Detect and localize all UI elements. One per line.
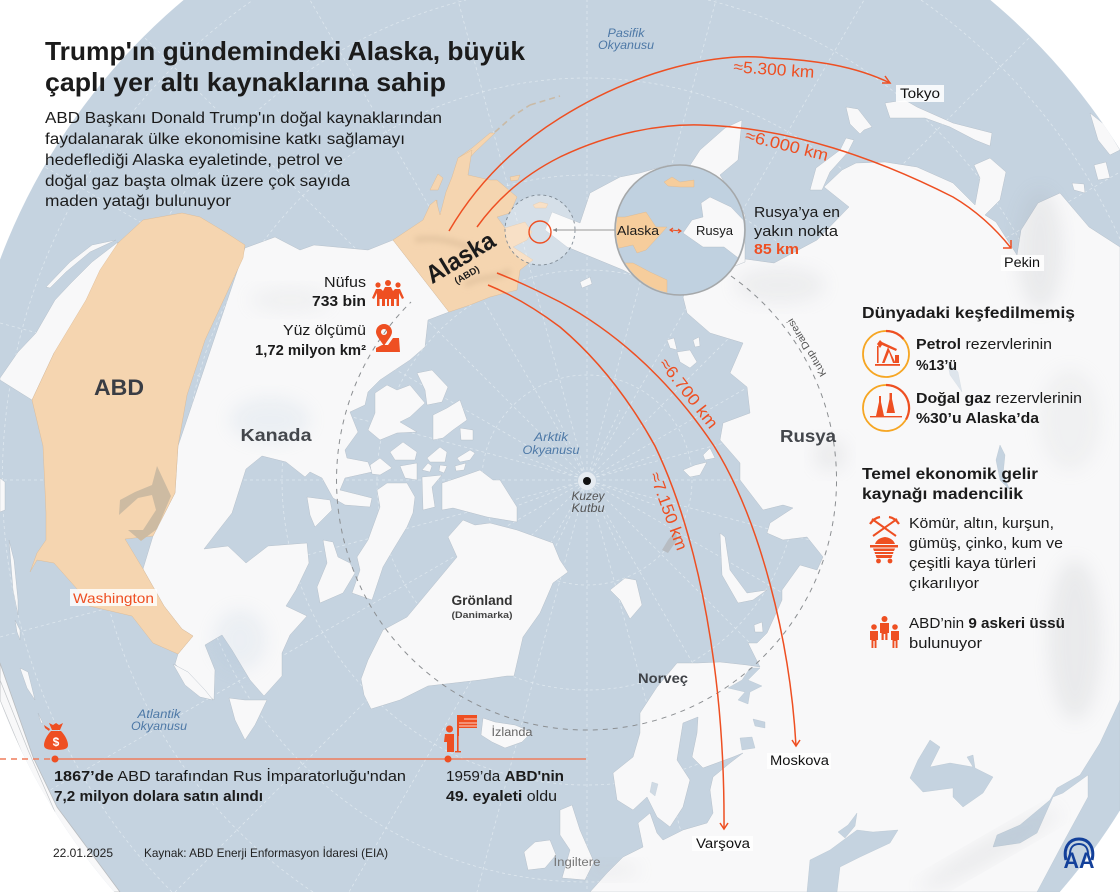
inset: Diomede island bbox=[664, 177, 694, 187]
land: Pacific and Arctic islands bbox=[430, 96, 1120, 632]
text: military bases bbox=[909, 616, 1065, 652]
label: USA: ABD bbox=[94, 375, 144, 400]
label: Washington: Washington bbox=[73, 590, 154, 606]
label: Canada: Kanada bbox=[240, 425, 312, 445]
intro paragraph: hedeflediği Alaska eyaletinde, petrol ve bbox=[45, 152, 343, 169]
route distance labels bbox=[646, 58, 830, 553]
city label: Moscow: Moskova bbox=[770, 753, 830, 768]
stat: area: Yüz ölçümü bbox=[283, 323, 366, 339]
city label: Warsaw: Varşova bbox=[696, 836, 751, 851]
land: relief shading bbox=[214, 190, 1101, 892]
region: Alaska bbox=[393, 150, 533, 312]
icon: map pin bbox=[376, 324, 400, 352]
stat: population: Nüfus bbox=[324, 275, 366, 291]
text: 1959 statehood bbox=[446, 768, 564, 805]
North Pole marker bbox=[572, 472, 606, 515]
label: Russia: Rusya bbox=[780, 426, 836, 446]
inset labels bbox=[617, 223, 734, 238]
label: Alaska: Alaska bbox=[421, 226, 501, 289]
text: oil share: Petrol rezervlerinin bbox=[916, 337, 1052, 353]
land: Greenland bbox=[361, 520, 568, 709]
heading: undiscovered reserves: Dünyadaki keşfedilmemiş bbox=[862, 305, 1075, 322]
land: Chukotka and Kamchatka bbox=[545, 120, 745, 290]
label: Atlantic Ocean: Atlantik bbox=[136, 709, 182, 721]
footer: source: Kaynak: ABD Enerji Enformasyon İdaresi (EIA) bbox=[144, 846, 388, 860]
label: Pacific Ocean: Pasifik bbox=[608, 28, 646, 40]
region: United States mainland bbox=[30, 213, 245, 654]
North Pole marker: Kutbu bbox=[572, 503, 605, 515]
land: Iceland bbox=[481, 718, 532, 748]
stat: population bbox=[312, 275, 366, 310]
intro paragraph: ABD Başkanı Donald Trump'ın doğal kaynaklarından bbox=[45, 110, 442, 127]
text: gas share: Doğal gaz rezervlerinin bbox=[916, 391, 1082, 407]
inset map: Bering Strait bbox=[610, 165, 750, 296]
city label: Tokyo: Tokyo bbox=[900, 86, 940, 101]
callout: nearest point to Russia bbox=[754, 204, 840, 258]
title: çaplı yer altı kaynaklarına sahip bbox=[45, 67, 446, 97]
text: minerals: gümüş, çinko, kum ve bbox=[909, 536, 1063, 552]
intro paragraph: faydalanarak ülke ekonomisine katkı sağlamayı bbox=[45, 131, 405, 148]
heading: mining bbox=[862, 466, 1038, 503]
intro paragraph: maden yatağı bulunuyor bbox=[45, 193, 232, 210]
label: Pacific Ocean: Okyanusu bbox=[598, 40, 655, 52]
map: Bering Strait locator bbox=[505, 195, 616, 265]
text: 1867 purchase: 1867’de ABD tarafından Rus İmparatorluğu'ndan bbox=[54, 767, 406, 785]
route: Moscow bbox=[497, 273, 800, 746]
North Pole marker: Kuzey bbox=[572, 491, 606, 503]
land: United Kingdom and Ireland bbox=[524, 805, 594, 880]
route: Warsaw bbox=[488, 285, 728, 829]
text: oil share bbox=[916, 337, 1052, 374]
text: gas share bbox=[916, 391, 1082, 427]
text: military bases: ABD’nin 9 askeri üssü bbox=[909, 616, 1065, 632]
route distance labels: ≈7.150 km bbox=[646, 470, 691, 553]
icon: soldiers bbox=[870, 616, 899, 648]
label: Arctic Ocean: Arktik bbox=[533, 432, 569, 444]
text: minerals: çeşitli kaya türleri bbox=[909, 556, 1036, 572]
icon: person with flag bbox=[444, 715, 477, 752]
text: military bases: bulunuyor bbox=[909, 636, 982, 652]
text: minerals: Kömür, altın, kurşun, bbox=[909, 516, 1054, 532]
footer: date: 22.01.2025 bbox=[53, 846, 113, 860]
label: Greenland: Grönland bbox=[452, 593, 512, 608]
inset labels: Rusya bbox=[696, 223, 734, 238]
heading: mining: Temel ekonomik gelir bbox=[862, 466, 1038, 483]
inset: lower Alaska coast bbox=[625, 262, 668, 293]
label: Greenland: (Danimarka) bbox=[452, 610, 512, 621]
text: 1867 purchase: 7,2 milyon dolara satın alındı bbox=[54, 788, 263, 805]
stat: area: 1,72 milyon km² bbox=[255, 343, 366, 359]
icon: gas rigs 30 percent ring bbox=[863, 385, 909, 431]
icon: mining cart bbox=[870, 517, 899, 563]
route distance labels: ≈6.000 km bbox=[743, 127, 830, 165]
city label: Tokyo bbox=[896, 85, 944, 102]
text: gas share: %30’u Alaska’da bbox=[916, 411, 1040, 427]
route: Beijing bbox=[477, 125, 1011, 248]
title: Trump'ın gündemindeki Alaska, büyük bbox=[45, 36, 526, 66]
label: Norway: Norveç bbox=[638, 670, 688, 686]
label: Pacific Ocean bbox=[598, 28, 655, 52]
text: 1959 statehood: 49. eyaleti oldu bbox=[446, 788, 557, 805]
label: Arctic Circle: Kutup Dairesi bbox=[785, 316, 829, 378]
text: 1959 statehood: 1959’da ABD'nin bbox=[446, 768, 564, 785]
text: minerals: çıkarılıyor bbox=[909, 576, 979, 592]
heading: mining: kaynağı madencilik bbox=[862, 486, 1023, 503]
label: Arctic Ocean: Okyanusu bbox=[522, 445, 580, 457]
region: Great Lakes bbox=[119, 466, 171, 541]
route: Tokyo bbox=[449, 57, 890, 231]
label: Alaska: (ABD) bbox=[453, 264, 482, 287]
land: Eurasia bbox=[590, 158, 1120, 892]
label: Arctic Ocean bbox=[522, 432, 580, 457]
label: England: İngiltere bbox=[554, 856, 600, 869]
route distance labels: ≈6.700 km bbox=[655, 355, 721, 432]
icon: people bbox=[372, 280, 404, 306]
logo: AA: AA bbox=[1064, 848, 1095, 873]
label: Iceland: İzlanda bbox=[492, 726, 533, 739]
route distance labels: ≈5.300 km bbox=[733, 58, 815, 82]
icon: money bag bbox=[44, 723, 68, 750]
text: minerals bbox=[909, 516, 1063, 592]
inset: Russia shape bbox=[683, 197, 744, 258]
timeline point 1959 bbox=[444, 756, 452, 762]
icon: oil pump 13 percent ring bbox=[863, 331, 909, 377]
stat: area bbox=[255, 323, 366, 359]
icon: money bag: $ bbox=[53, 735, 60, 749]
land: Canadian Arctic islands bbox=[173, 370, 517, 740]
callout: nearest point to Russia: yakın nokta bbox=[754, 223, 839, 240]
callout: nearest point to Russia: Rusya’ya en bbox=[754, 204, 840, 221]
intro paragraph bbox=[45, 110, 442, 210]
text: oil share: %13’ü bbox=[916, 358, 957, 374]
timeline bbox=[0, 756, 586, 762]
callout: nearest point to Russia: 85 km bbox=[754, 241, 799, 258]
city label: Beijing: Pekin bbox=[1004, 255, 1040, 270]
land: Canada bbox=[143, 237, 449, 700]
stat: population: 733 bin bbox=[312, 294, 366, 310]
timeline point 1867 bbox=[52, 756, 58, 762]
intro paragraph: doğal gaz başta olmak üzere çok sayıda bbox=[45, 173, 350, 190]
label: Atlantic Ocean: Okyanusu bbox=[131, 721, 188, 733]
line: Arctic Circle bbox=[337, 276, 837, 730]
land: Mexico and Central America bbox=[0, 240, 120, 892]
text: 1867 purchase bbox=[54, 767, 406, 805]
seas: inland water bbox=[650, 360, 1120, 892]
title bbox=[45, 36, 526, 97]
inset: Alaska shape bbox=[610, 212, 667, 253]
label: Atlantic Ocean bbox=[131, 709, 188, 733]
label: Greenland bbox=[452, 593, 512, 621]
inset labels: Alaska bbox=[617, 223, 660, 238]
